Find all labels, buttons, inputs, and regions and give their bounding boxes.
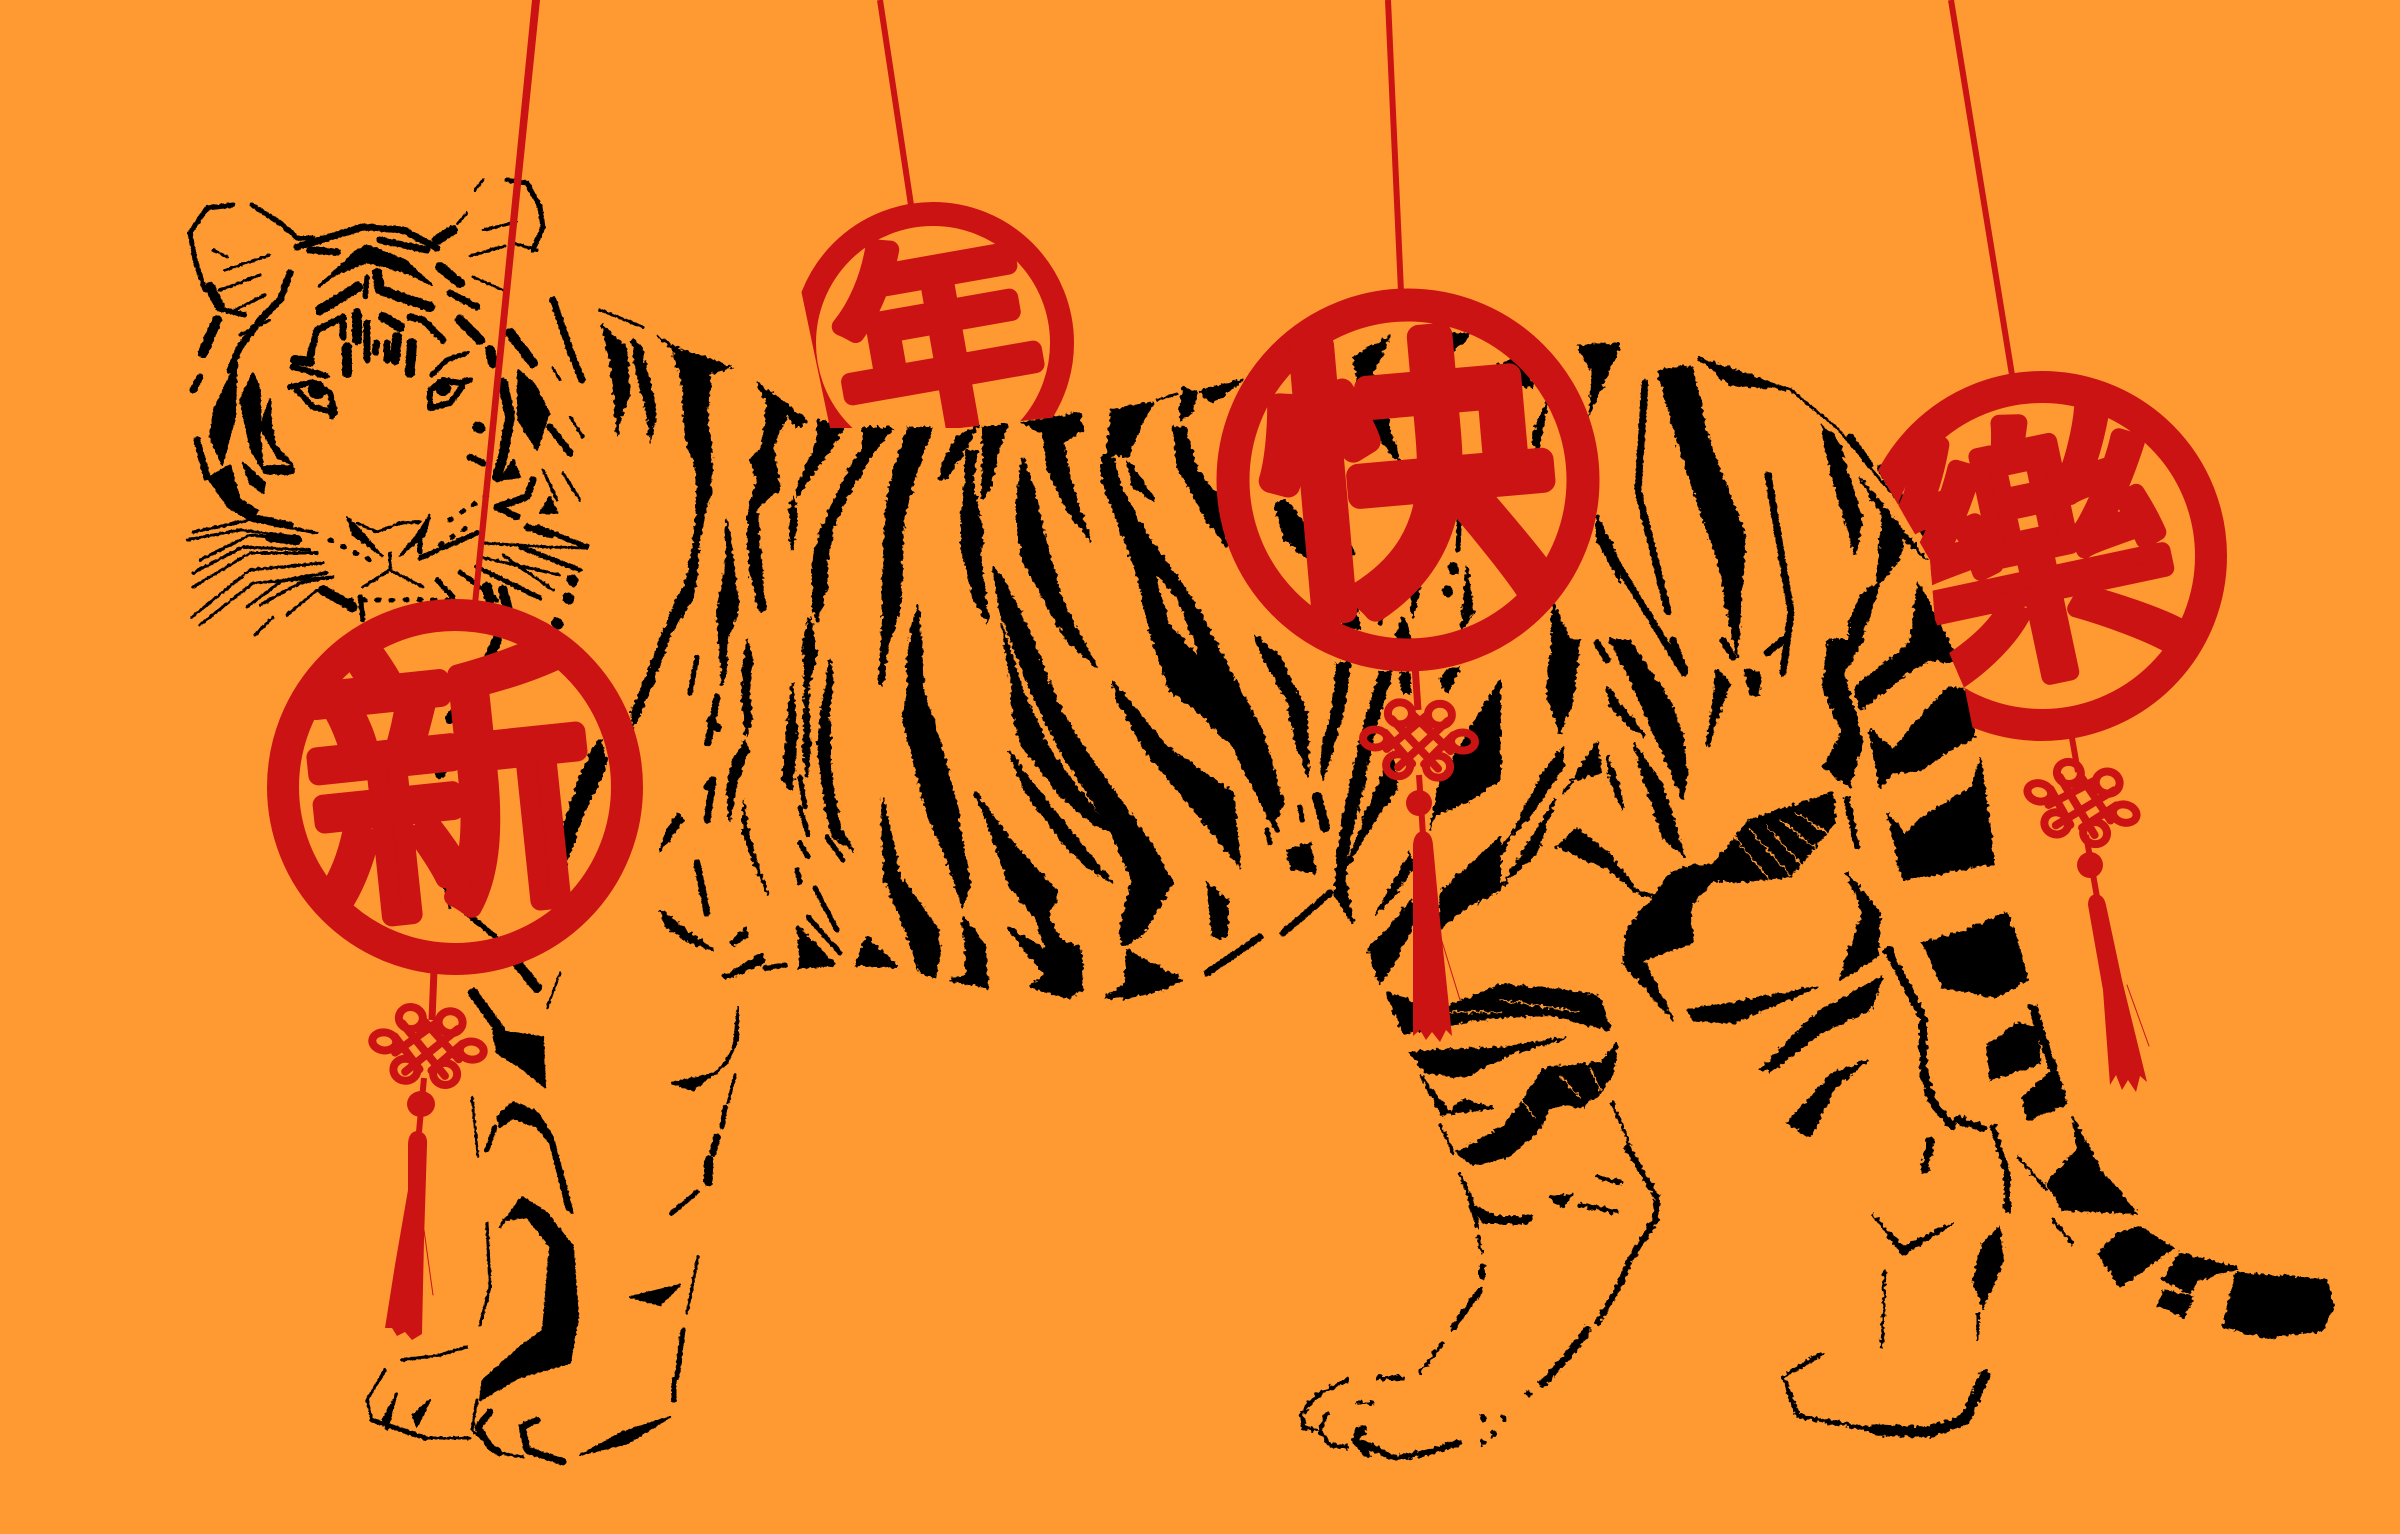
knot and tassel xyxy=(368,970,488,1340)
string xyxy=(880,0,911,205)
string xyxy=(1951,0,2012,375)
character 年: 年 xyxy=(816,211,1058,472)
ring xyxy=(1233,305,1583,655)
ornament: 新 xyxy=(283,0,627,1340)
ornament: 年 xyxy=(804,0,1062,472)
character 樂: 樂 xyxy=(1866,377,2205,741)
ornament: 樂 xyxy=(1866,0,2211,1092)
string xyxy=(1388,0,1401,292)
ornament: 快 xyxy=(1233,0,1583,1042)
knot and tassel xyxy=(2019,738,2149,1092)
ring xyxy=(1873,387,2211,725)
tiger neck and body stripes xyxy=(543,325,1863,998)
knot and tassel xyxy=(1362,665,1476,1042)
tiger head xyxy=(187,180,643,635)
tiger front legs xyxy=(367,1007,738,1462)
tiger hind legs and paws xyxy=(1302,793,2072,1458)
character 快: 快 xyxy=(1250,308,1567,656)
tiger xyxy=(187,180,2333,1462)
ring and character, cut off by the tiger's back xyxy=(1866,377,2211,741)
string xyxy=(472,0,540,604)
character 新: 新 xyxy=(292,617,608,963)
tiger tail xyxy=(1850,478,2333,1337)
ring and character, cut off by the tiger's back xyxy=(804,211,1062,472)
ring xyxy=(804,214,1062,472)
tiger hatch marks on body xyxy=(427,360,1927,1157)
ring xyxy=(283,615,627,959)
